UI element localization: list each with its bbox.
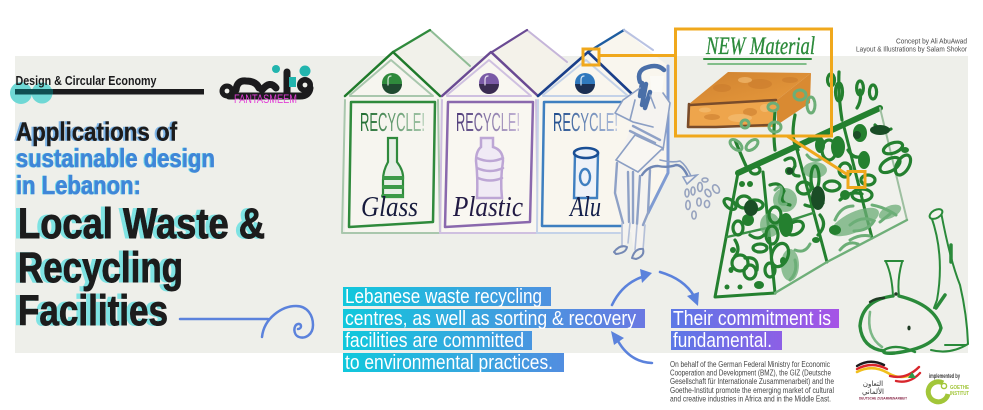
logo: Goethe-Institut: implemented by bbox=[929, 374, 960, 380]
illustration: new material brick: NEW Material bbox=[705, 33, 815, 60]
text block: funding statement bbox=[670, 359, 834, 404]
title: local waste and recycling facilities: Local Waste & bbox=[18, 200, 265, 248]
panel: plastic recycling bin bbox=[440, 30, 567, 233]
illustration: green wall structure with plants bbox=[715, 72, 914, 297]
title: local waste and recycling facilities: Recycling bbox=[18, 244, 183, 292]
title: applications of sustainable design in Lebanon: in Lebanon: bbox=[16, 170, 141, 200]
title: applications of sustainable design in Lebanon: Applications of bbox=[16, 116, 177, 146]
text block: waste recycling centres: facilities are committed bbox=[345, 330, 524, 352]
illustration: new material brick bbox=[688, 33, 815, 128]
text block: their commitment bbox=[671, 308, 839, 352]
illustration: woman with watering can bbox=[614, 66, 721, 259]
panel: glass recycling bin bbox=[342, 30, 470, 233]
text block: their commitment: Their commitment is bbox=[673, 308, 831, 330]
text block: waste recycling centres: to environmental practices. bbox=[345, 352, 553, 374]
text block: funding statement: Cooperation and Development (BMZ), the GIZ (Deutsche bbox=[670, 368, 831, 378]
credits: Concept by Ali AbuAwad bbox=[896, 36, 967, 46]
panel: aluminium recycling bin: Alu bbox=[568, 192, 601, 223]
callout lines: orange magnifier bbox=[583, 29, 865, 188]
panel: plastic recycling bin: RECYCLE! bbox=[456, 107, 520, 137]
panel: aluminium recycling bin bbox=[537, 30, 668, 233]
header: section label: Design & Circular Economy bbox=[16, 74, 157, 88]
header: section label bbox=[10, 74, 204, 104]
title: local waste and recycling facilities bbox=[18, 200, 265, 335]
arrows: cycle bbox=[611, 269, 699, 363]
text block: funding statement: Goethe-Institut promote the emerging market of cultural bbox=[670, 385, 834, 395]
title: applications of sustainable design in Lebanon bbox=[16, 116, 215, 200]
logo: German-Lebanese cooperation: الألماني bbox=[862, 387, 884, 396]
panel: aluminium recycling bin: RECYCLE! bbox=[553, 107, 618, 137]
logo: Goethe-Institut bbox=[928, 374, 969, 402]
text block: funding statement: and creative industries in Africa and in the Middle East. bbox=[670, 394, 831, 404]
panel: glass recycling bin: RECYCLE! bbox=[360, 107, 425, 137]
logo: Fantasmeem: FANTASMEEM bbox=[234, 94, 297, 106]
text block: their commitment: fundamental. bbox=[673, 330, 772, 352]
panel: plastic recycling bin: Plastic bbox=[452, 192, 524, 223]
logo: Goethe-Institut: INSTITUT bbox=[950, 391, 969, 397]
credits bbox=[856, 36, 967, 54]
text block: funding statement: Gesellschaft für Internationale Zusammenarbeit) and the bbox=[670, 376, 834, 386]
title: local waste and recycling facilities: Facilities bbox=[18, 287, 168, 335]
text block: waste recycling centres: Lebanese waste recycling bbox=[345, 286, 542, 308]
credits: Layout & Illustrations by Salam Shokor bbox=[856, 44, 967, 54]
panel: glass recycling bin: Glass bbox=[361, 192, 418, 223]
text block: waste recycling centres: centres, as well as sorting & recovery bbox=[345, 308, 636, 330]
logo: German-Lebanese cooperation: DEUTSCHE ZUSAMMENARBEIT bbox=[859, 396, 908, 400]
illustration: glass flasks bbox=[860, 207, 968, 353]
logo: Fantasmeem bbox=[220, 65, 313, 106]
logo: Goethe-Institut: GOETHE bbox=[950, 385, 969, 391]
text block: waste recycling centres bbox=[343, 286, 645, 374]
icon: swirl line bbox=[180, 306, 313, 338]
logo: German-Lebanese cooperation bbox=[857, 362, 920, 400]
text block: funding statement: On behalf of the German Federal Ministry for Economic bbox=[670, 359, 831, 369]
logo: German-Lebanese cooperation: التعاون bbox=[863, 380, 883, 388]
paper background bbox=[15, 56, 968, 353]
title: applications of sustainable design in Lebanon: sustainable design bbox=[16, 143, 215, 173]
